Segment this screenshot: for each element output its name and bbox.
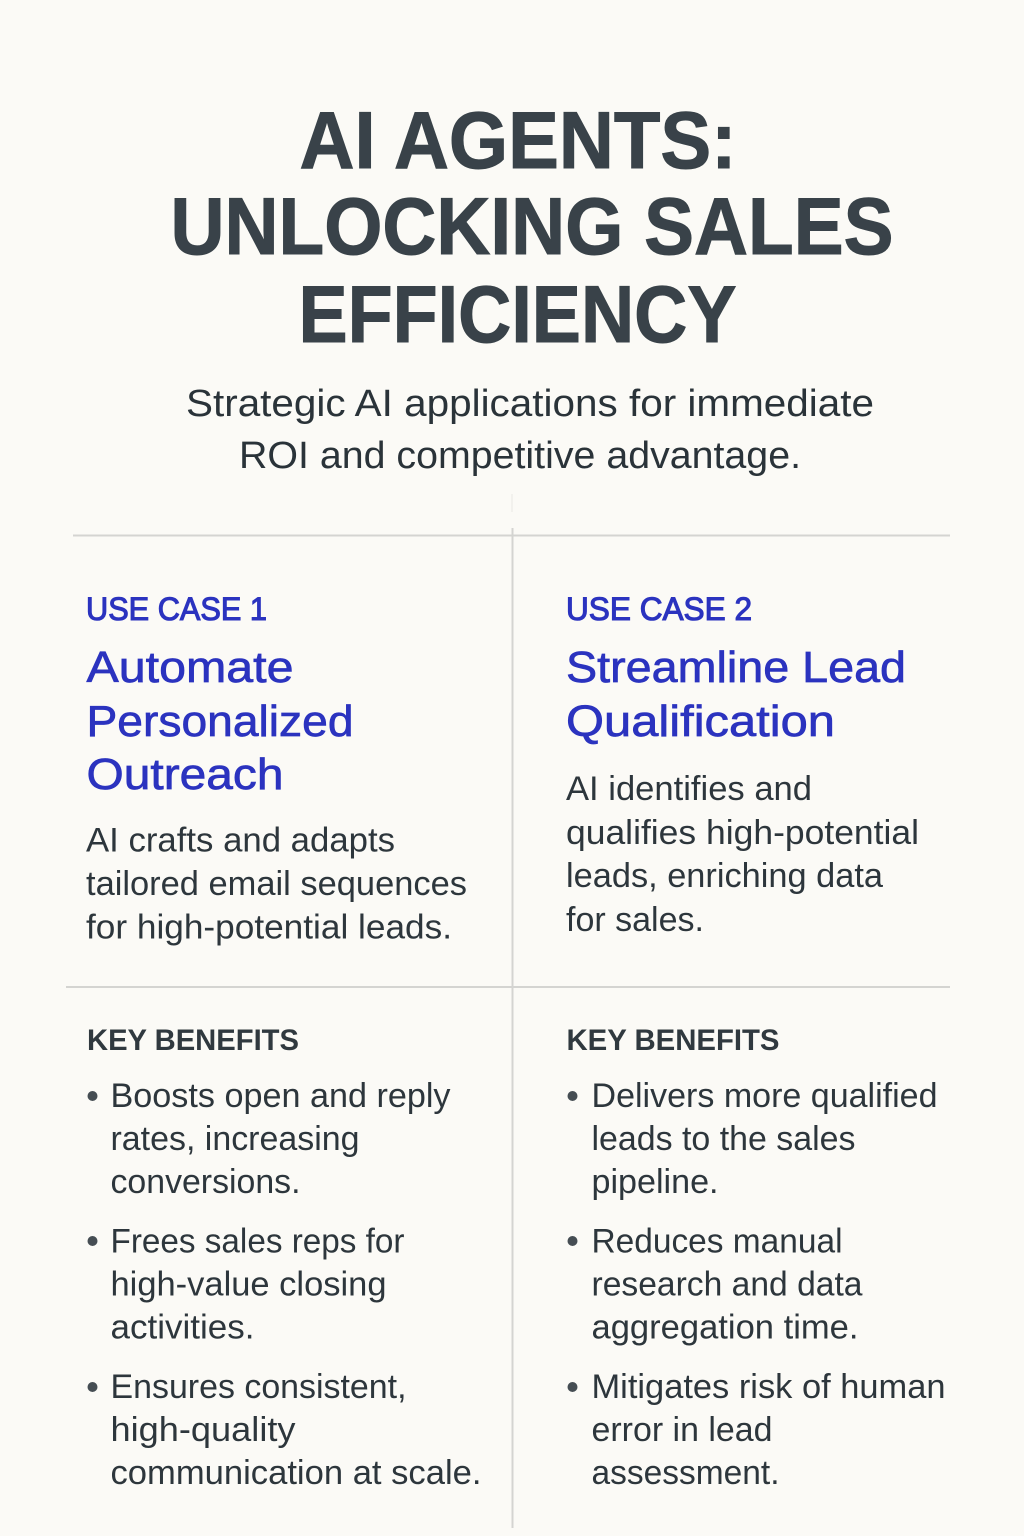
panel: use case 1 [86, 591, 467, 946]
benefit: open and reply rates: rates, increasing [110, 1120, 360, 1158]
subtitle: Strategic AI applications for immediate [186, 383, 874, 425]
benefit: frees sales reps: activities. [110, 1308, 254, 1346]
benefit: frees sales reps: high-value closing [110, 1266, 386, 1304]
title [170, 96, 894, 360]
description: use case 2: qualifies high-potential [566, 814, 919, 852]
benefit: frees sales reps: Frees sales reps for [110, 1222, 404, 1260]
description: use case 1 [86, 822, 467, 946]
panel: key benefits 1 [87, 1024, 482, 1492]
description: use case 1: AI crafts and adapts [86, 822, 395, 860]
benefit: qualified leads [568, 1077, 938, 1201]
title: AI AGENTS: [300, 96, 736, 186]
description: use case 1: tailored email sequences [86, 865, 467, 903]
description: use case 2: leads, enriching data [566, 857, 883, 895]
benefit: mitigates human error: error in lead [592, 1411, 772, 1449]
benefit: qualified leads: pipeline. [592, 1163, 718, 1201]
benefit: reduces manual research: Reduces manual [592, 1222, 842, 1260]
description: use case 2: AI identifies and [566, 770, 812, 808]
heading: automate personalized outreach: Personalized [86, 697, 354, 746]
benefit: consistent communication: communication at scale. [110, 1454, 482, 1492]
description: use case 2 [566, 770, 919, 939]
heading: streamline lead qualification: Qualification [566, 697, 835, 746]
subtitle [186, 383, 874, 477]
benefit: open and reply rates: conversions. [110, 1163, 300, 1201]
benefit: mitigates human error [568, 1368, 946, 1492]
benefit: reduces manual research: aggregation time. [592, 1308, 858, 1346]
heading: streamline lead qualification: Streamline Lead [566, 643, 906, 692]
label: use case 1: USE CASE 1 [86, 591, 267, 627]
heading: automate personalized outreach [86, 643, 354, 799]
label: use case 2: USE CASE 2 [566, 591, 752, 627]
subtitle: ROI and competitive advantage. [239, 435, 801, 477]
description: use case 2: for sales. [566, 901, 704, 939]
panel: key benefits 2 [566, 1024, 946, 1492]
benefit: consistent communication: Ensures consistent, [110, 1368, 406, 1406]
panel: use case 2 [566, 591, 919, 939]
benefit: consistent communication: high-quality [110, 1411, 296, 1449]
benefit: mitigates human error: Mitigates risk of human [592, 1368, 946, 1406]
benefit: reduces manual research: research and data [592, 1266, 863, 1304]
title: UNLOCKING SALES [170, 182, 894, 272]
benefit: open and reply rates: Boosts open and reply [110, 1077, 450, 1115]
heading: key benefits 1: KEY BENEFITS [87, 1024, 299, 1057]
benefit: consistent communication [88, 1368, 482, 1492]
benefit: frees sales reps [88, 1222, 404, 1346]
heading: key benefits 2: KEY BENEFITS [566, 1024, 780, 1057]
description: use case 1: for high-potential leads. [86, 908, 452, 946]
benefit: mitigates human error: assessment. [592, 1454, 780, 1492]
benefit: qualified leads: Delivers more qualified [592, 1077, 938, 1115]
benefit: qualified leads: leads to the sales [592, 1120, 856, 1158]
heading: automate personalized outreach: Automate [86, 643, 294, 692]
title: EFFICIENCY [298, 270, 736, 360]
benefit: reduces manual research [568, 1222, 863, 1346]
heading: streamline lead qualification [566, 643, 906, 746]
benefit: open and reply rates [88, 1077, 450, 1201]
heading: automate personalized outreach: Outreach [86, 750, 284, 799]
